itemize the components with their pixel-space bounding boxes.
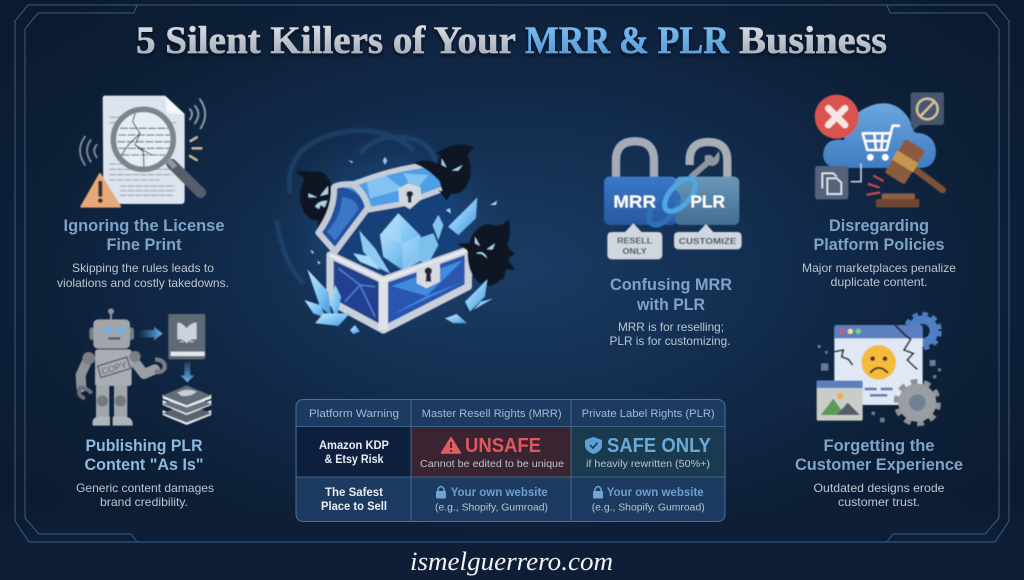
row: Amazon KDP and Etsy risk: if heavily rewritten (50%+): [586, 458, 710, 470]
heading line 2: Customer Experience: [795, 455, 963, 474]
icon: linked padlocks: PLR: [690, 191, 725, 211]
heading: Ignoring the License: [64, 216, 224, 235]
row: Amazon KDP and Etsy risk: Cannot be edited to be unique: [420, 458, 564, 470]
footer website: ismelguerrero.com: [410, 547, 613, 576]
icon: document under magnifier: [80, 96, 205, 207]
ghost: lower right: [457, 218, 515, 286]
row: Amazon KDP and Etsy risk: UNSAFE: [465, 435, 541, 457]
description: MRR is for reselling;: [618, 320, 724, 334]
panel: confusing MRR with PLR: [604, 141, 742, 348]
footer band: [0, 490, 1024, 580]
chest base: [330, 250, 468, 330]
heading line 2: Fine Print: [106, 235, 182, 254]
row: the safest place to sell: (e.g., Shopify, Gumroad): [435, 502, 548, 514]
row: the safest place to sell: (e.g., Shopify, Gumroad): [592, 502, 705, 514]
icon: linked padlocks: CUSTOMIZE: [679, 236, 737, 246]
crystals on the ground: [304, 157, 497, 334]
icon: robot copying books: COPY: [100, 359, 128, 377]
crystals inside chest: [353, 197, 477, 273]
description line 2: PLR is for customizing.: [610, 334, 730, 348]
table header: [309, 408, 715, 420]
panel: forgetting customer experience: [795, 314, 963, 509]
row: Amazon KDP and Etsy risk: & Etsy Risk: [324, 454, 384, 466]
heading line 2: with PLR: [636, 295, 705, 314]
row: Amazon KDP and Etsy risk: SAFE ONLY: [607, 435, 712, 457]
description line 2: brand credibility.: [100, 495, 188, 509]
panel: disregarding platform policies: [802, 92, 956, 289]
heading: Publishing PLR: [86, 436, 202, 455]
row: Amazon KDP and Etsy risk: Amazon KDP: [319, 440, 389, 452]
icon: broken website and gears: [817, 314, 941, 423]
table header: Platform Warning: [309, 408, 399, 420]
title: 5 Silent Killers of Your: [136, 19, 516, 62]
illustration: treasure chest with shadow ghosts: [263, 117, 523, 350]
ghost: upper right: [413, 145, 475, 201]
chest lid: [318, 165, 452, 252]
heading line 2: Content "As Is": [84, 455, 204, 474]
row: the safest place to sell: The Safest: [325, 487, 383, 499]
heading: Forgetting the: [824, 436, 934, 455]
comparison table: [296, 400, 725, 522]
title: MRR & PLR: [525, 19, 730, 62]
icon: linked padlocks: MRR: [613, 191, 656, 211]
heading line 2: Platform Policies: [814, 235, 944, 254]
ghost: left: [296, 171, 333, 227]
description line 2: customer trust.: [838, 495, 920, 509]
description: Outdated designs erode: [814, 481, 945, 495]
row: the safest place to sell: Place to Sell: [321, 501, 387, 513]
table header: Private Label Rights (PLR): [582, 408, 715, 420]
description: Major marketplaces penalize: [802, 261, 956, 275]
description line 2: duplicate content.: [830, 275, 928, 289]
row: the safest place to sell: [321, 485, 705, 514]
icon: linked padlocks: [604, 141, 742, 259]
row: Amazon KDP and Etsy risk: [319, 435, 712, 470]
row: the safest place to sell: Your own website: [607, 485, 704, 499]
icon: cloud cart and gavel: [815, 92, 944, 207]
title: [136, 19, 887, 62]
icon: linked padlocks: ONLY: [622, 246, 647, 256]
row: the safest place to sell: Your own website: [451, 485, 548, 499]
heading: Disregarding: [829, 216, 929, 235]
chest interior: [330, 188, 468, 280]
heading: Confusing MRR: [610, 275, 732, 294]
description: Generic content damages: [76, 481, 214, 495]
description: Skipping the rules leads to: [72, 261, 214, 275]
panel: publishing as is: [76, 308, 214, 509]
description line 2: violations and costly takedowns.: [57, 276, 229, 290]
icon: robot copying books: [79, 308, 211, 426]
table header: Master Resell Rights (MRR): [422, 408, 562, 420]
title: Business: [739, 19, 887, 62]
panel: ignoring the license: [57, 96, 229, 290]
icon: linked padlocks: RESELL: [617, 236, 653, 246]
